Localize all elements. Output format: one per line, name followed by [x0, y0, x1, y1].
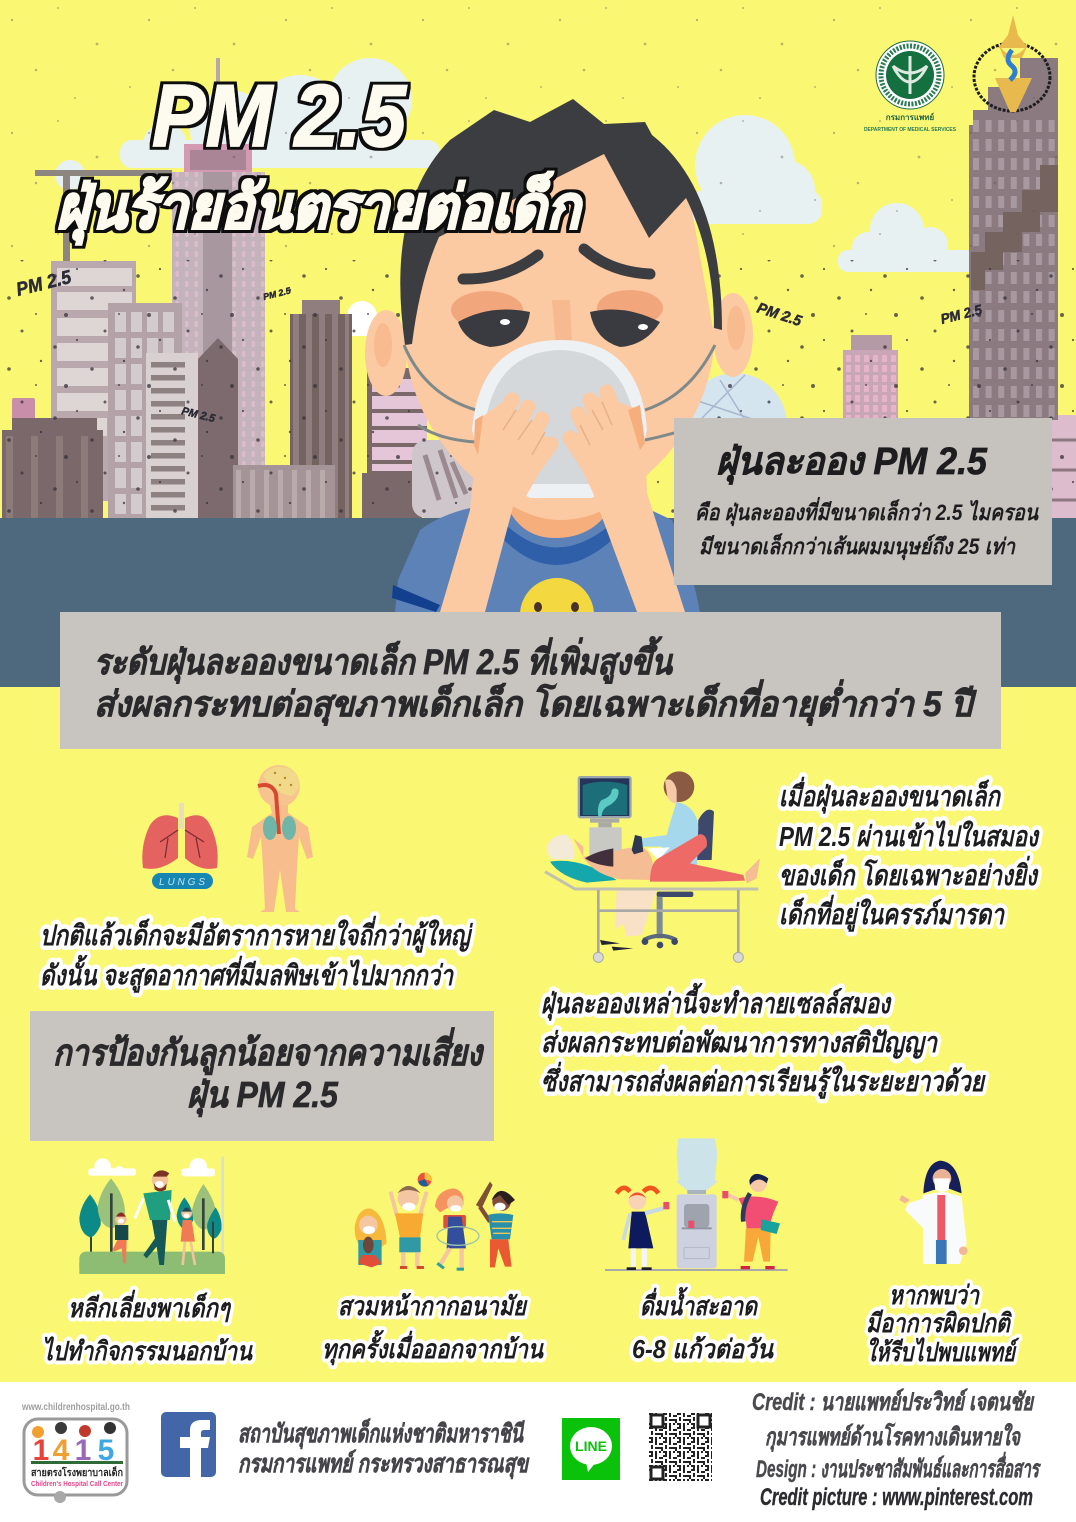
caption: drink clean water: 6-8 แก้วต่อวัน: [632, 1334, 774, 1364]
far-left building: [2, 398, 103, 520]
logo: Ministry of Public Health: [864, 41, 957, 133]
caption: drink clean water: ดื่มน้ำสะอาด: [640, 1286, 759, 1321]
panel: definition of PM 2.5: [674, 418, 1052, 585]
footer: institute name: กรมการแพทย์ กระทรวงสาธารณสุข: [238, 1449, 529, 1479]
footer: institute name: [238, 1418, 529, 1479]
text: dust destroys brain cells: [541, 982, 986, 1099]
caption: wear a mask: สวมหน้ากากอนามัย: [338, 1291, 528, 1321]
text: dust destroys brain cells: ส่งผลกระทบต่อพัฒนาการทางสติปัญญา: [541, 1027, 938, 1059]
eyelids: [451, 290, 663, 329]
eyebrows: [463, 249, 650, 279]
office building: [51, 261, 136, 501]
panel: prevention heading: การป้องกันลูกน้อยจากความเสี่ยง: [53, 1027, 485, 1075]
text: children breathe faster: ปกติแล้วเด็กจะมีอัตราการหายใจถี่กว่าผู้ใหญ่: [40, 915, 473, 953]
building with windows: [108, 303, 182, 519]
title: [56, 66, 583, 245]
pink building: [362, 368, 427, 520]
mask straps: [404, 345, 715, 442]
footer: institute name: สถาบันสุขภาพเด็กแห่งชาติมหาราชินี: [238, 1418, 525, 1449]
footer: 1415 call centre logo: [21, 1402, 130, 1503]
neck: [510, 490, 608, 538]
caption: wear a mask: [322, 1291, 544, 1366]
eyes: [458, 310, 660, 347]
logo: royal emblem: [974, 15, 1050, 112]
right pink building: [843, 335, 1076, 520]
panel: prevention heading: [30, 1011, 494, 1141]
floating PM 2.5 labels: PM 2.5: [180, 405, 217, 425]
text: fine dust reaches the brain: เมื่อฝุ่นละอองขนาดเล็ก: [779, 776, 1002, 814]
smiley on shirt: [520, 578, 594, 652]
icon: kids wearing masks: [355, 1173, 515, 1271]
caption: drink clean water: [632, 1286, 774, 1364]
face: [405, 140, 715, 520]
definition text: คือ ฝุ่นละอองที่มีขนาดเล็กว่า 2.5 ไมครอน: [695, 496, 1039, 527]
hair: [400, 99, 722, 345]
text: dust destroys brain cells: ฝุ่นละอองเหล่านี้จะทำลายเซลล์สมอง: [541, 982, 892, 1021]
low building: [233, 465, 335, 520]
caption: see a doctor: มีอาการผิดปกติ: [866, 1308, 1012, 1338]
dust specks: [0, 0, 1076, 260]
footer: 1415 call centre logo: 4: [53, 1434, 70, 1467]
lungs: [142, 803, 218, 889]
text: children breathe faster: ดังนั้น จะสูดอากาศที่มีมลพิษเข้าไปมากกว่า: [40, 954, 454, 993]
text: children breathe faster: [40, 915, 473, 993]
slatted building: [146, 353, 198, 519]
caption: wear a mask: ทุกครั้งเมื่อออกจากบ้าน: [322, 1329, 544, 1366]
title: PM 2.5: [152, 66, 407, 165]
logo: Ministry of Public Health: กรมการแพทย์: [886, 112, 935, 122]
icon: family walking in park: [79, 1157, 225, 1274]
tall right tower: [969, 58, 1058, 420]
footer: 1415 call centre logo: 1: [33, 1434, 49, 1467]
right hand and arm: [570, 392, 685, 612]
footer background: [0, 1382, 1076, 1522]
footer: LINE icon: LINE: [575, 1438, 607, 1454]
panel: prevention heading: ฝุ่น PM 2.5: [187, 1074, 339, 1117]
panel heading: ฝุ่นละออง PM 2.5: [716, 441, 988, 485]
mask: [472, 340, 647, 498]
floating PM 2.5 labels: PM 2.5: [755, 300, 804, 330]
ferris wheel: [412, 373, 787, 518]
ears: [365, 293, 753, 396]
lungs: LUNGS: [159, 877, 205, 888]
caption: avoid outdoor activities: หลีกเลี่ยงพาเด็กๆ: [68, 1289, 232, 1323]
logo: Ministry of Public Health: DEPARTMENT OF MEDICAL SERVICES: [864, 127, 957, 133]
bed: [545, 872, 758, 889]
footer: QR code: [649, 1413, 712, 1481]
patient: [547, 834, 760, 883]
floating PM 2.5 labels: PM 2.5: [262, 285, 293, 302]
floating PM 2.5 labels: PM 2.5: [939, 301, 984, 327]
hero illustration: polluted city skyline: [0, 0, 1076, 520]
left hand and arm: [440, 400, 555, 612]
captions: prevention advice: [42, 1280, 1020, 1367]
footer: Facebook icon: [161, 1412, 216, 1477]
footer: 1415 call centre logo: 5: [98, 1434, 114, 1467]
panel: main message: ส่งผลกระทบต่อสุขภาพเด็กเล็ก โดยเฉพาะเด็กที่อายุต่ำกว่า 5 ปี: [94, 679, 977, 726]
definition text: มีขนาดเล็กกว่าเส้นผมมนุษย์ถึง 25 เท่า: [699, 533, 1016, 561]
monitor: [578, 776, 632, 818]
child body: [247, 765, 313, 912]
floating PM 2.5 labels: PM 2.5: [14, 267, 74, 301]
clouds: [55, 58, 985, 272]
footer: LINE icon: [562, 1418, 620, 1480]
illustration: boy wearing a mask: [365, 99, 753, 652]
caption: see a doctor: ให้รีบไปพบแพทย์: [866, 1337, 1020, 1367]
caption: avoid outdoor activities: ไปทำกิจกรรมนอกบ้าน: [42, 1336, 253, 1366]
text: fine dust reaches the brain: เด็กที่อยู่ในครรภ์มารดา: [779, 894, 1005, 932]
footer: credits: [752, 1388, 1042, 1511]
text: fine dust reaches the brain: [779, 776, 1040, 932]
floating PM 2.5 labels: [14, 267, 984, 425]
footer: 1415 call centre logo: สายตรงโรงพยาบาลเด็ก: [31, 1465, 123, 1479]
tower with antenna: [172, 58, 265, 520]
caption: see a doctor: หากพบว่า: [889, 1280, 980, 1310]
definition text: [695, 496, 1039, 561]
caption: avoid outdoor activities: [42, 1289, 253, 1366]
dark smog band: [0, 518, 1076, 687]
spire building: [198, 338, 238, 520]
footer: 1415 call centre logo: Children's Hospital Call Center: [31, 1479, 123, 1488]
panel: main message: [60, 612, 1001, 749]
footer: 1415 call centre logo: www.childrenhospital.go.th: [21, 1402, 130, 1413]
caption: see a doctor: [866, 1280, 1020, 1367]
icon: kids at water cooler: [605, 1138, 788, 1271]
shirt: [395, 505, 700, 612]
icon: ultrasound of pregnant mother: [545, 771, 760, 962]
chair: [697, 810, 714, 860]
icon: lungs and child body: [142, 765, 313, 912]
title: ฝุ่นร้ายอันตรายต่อเด็ก: [56, 171, 583, 245]
footer: 1415 call centre logo: 1: [75, 1434, 91, 1467]
nose shadow: [552, 300, 572, 345]
text: dust destroys brain cells: ซึ่งสามารถส่งผลต่อการเรียนรู้ในระยะยาวด้วย: [541, 1061, 986, 1099]
doctor: [600, 771, 698, 951]
tall dark building: [290, 300, 352, 520]
panel: main message: ระดับฝุ่นละอองขนาดเล็ก PM 2.5 ที่เพิ่มสูงขึ้น: [94, 636, 674, 684]
crane: [35, 170, 172, 262]
icon: doctor in white coat: [899, 1161, 968, 1264]
